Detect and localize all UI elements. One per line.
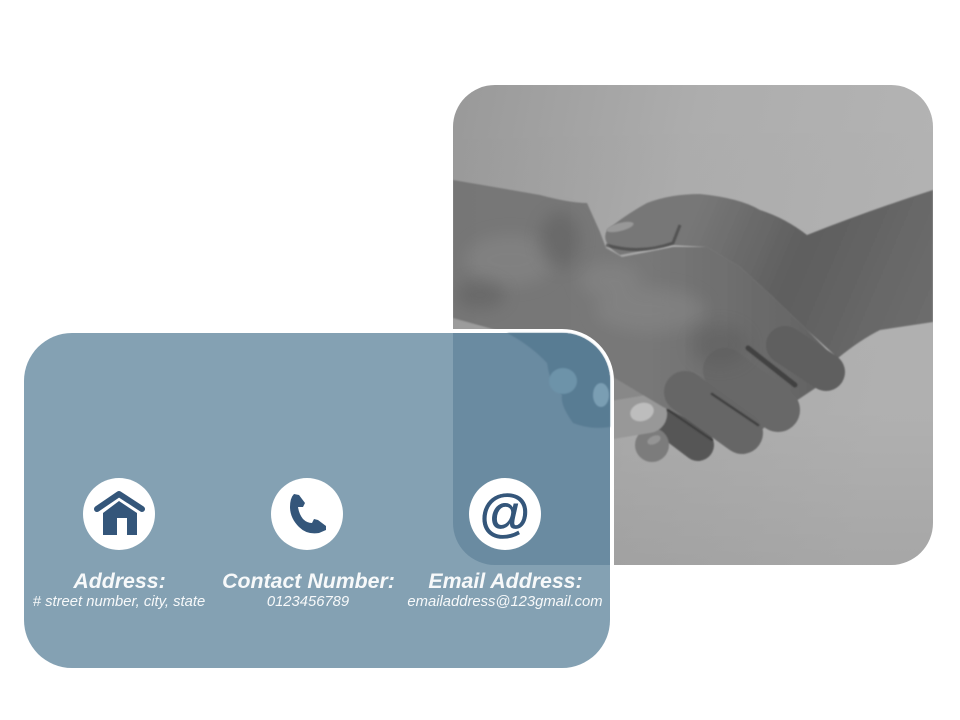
heading: email address: Email Address: bbox=[428, 569, 583, 593]
dark little finger bbox=[665, 420, 698, 445]
icon: at sign: @ bbox=[479, 485, 531, 543]
email column bbox=[407, 478, 603, 610]
icon: phone bbox=[271, 478, 343, 550]
icon: house bbox=[83, 478, 155, 550]
fingers of the left hand bbox=[685, 345, 826, 433]
right forearm and hand bbox=[605, 190, 933, 358]
photo: handshake bbox=[453, 85, 933, 565]
knuckle shading bbox=[475, 245, 696, 324]
heading: contact number: Contact Number: bbox=[222, 569, 395, 593]
contact panel bbox=[22, 331, 612, 670]
text: phone number: 0123456789 bbox=[267, 594, 349, 610]
contact number column bbox=[222, 478, 395, 610]
thumbnail bbox=[607, 222, 634, 232]
text: address detail: # street number, city, state bbox=[33, 594, 205, 610]
heading: address: Address: bbox=[72, 569, 166, 593]
finger gaps bbox=[668, 348, 795, 440]
text: email: emailaddress@123gmail.com bbox=[407, 594, 603, 610]
thumb shadow bbox=[606, 225, 680, 250]
left forearm and hand bbox=[453, 180, 837, 440]
fingernails bbox=[630, 402, 654, 422]
address column bbox=[33, 478, 205, 610]
lower fingers of the right hand bbox=[614, 378, 670, 462]
icon: at sign bbox=[469, 478, 541, 550]
